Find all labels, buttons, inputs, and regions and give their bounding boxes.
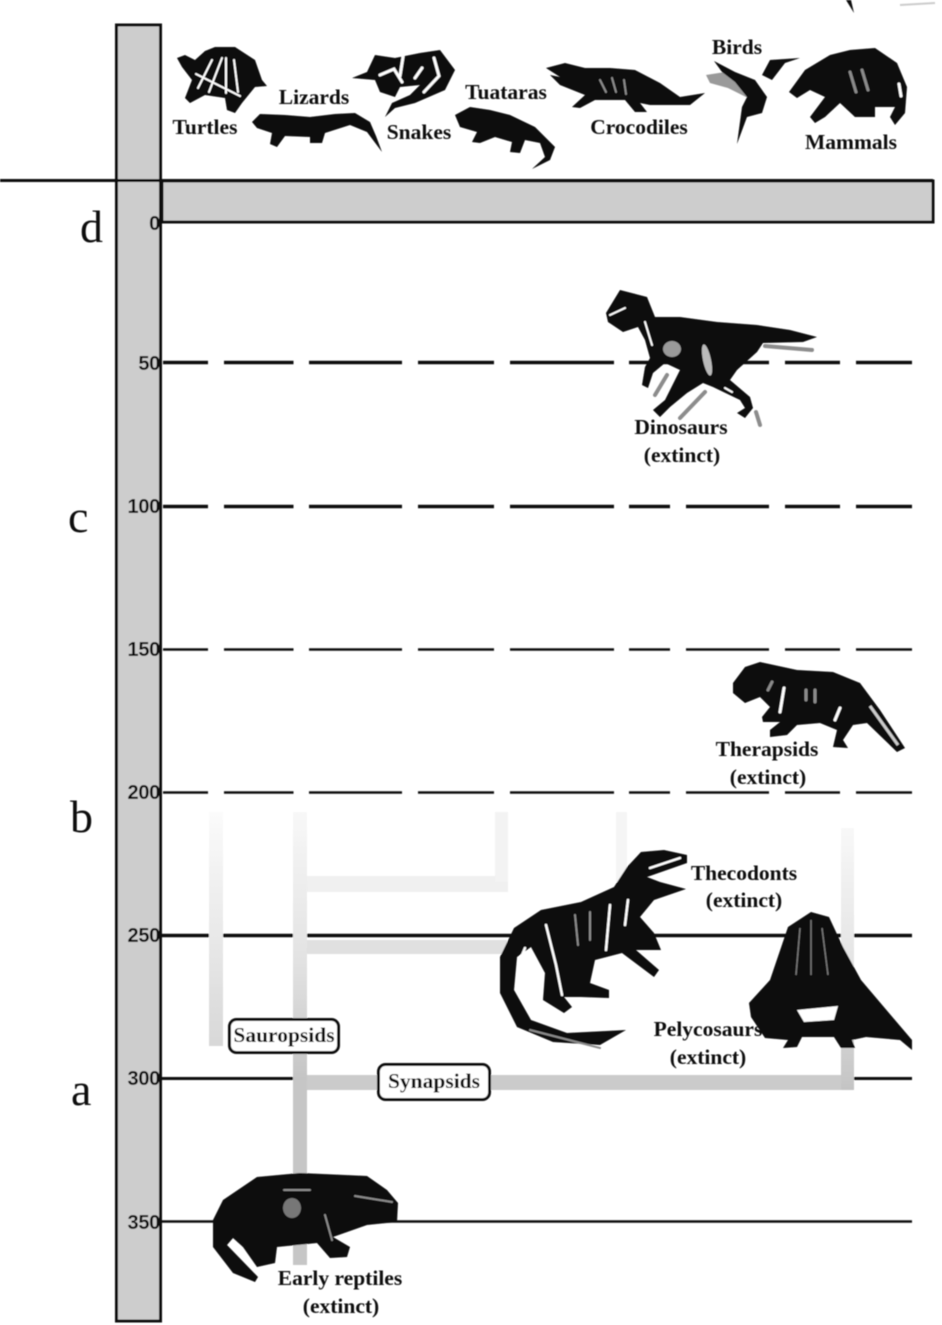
- label: Sauropsids: [230, 1020, 338, 1052]
- icon: mammal: [789, 48, 907, 125]
- icon: snake: [352, 50, 455, 117]
- top band at 0: [162, 181, 933, 222]
- side letters: a: [71, 1064, 91, 1115]
- icon: lizard: [252, 113, 382, 152]
- text: Mammals: Mammals: [805, 130, 897, 154]
- axis numbers: 100: [128, 496, 160, 518]
- text: Birds: Birds: [712, 35, 762, 59]
- text: Pelycosaurs extinct: (extinct): [670, 1045, 746, 1069]
- text: Turtles: Turtles: [173, 115, 237, 139]
- axis numbers: 250: [128, 925, 160, 947]
- icon: dinosaur: [606, 290, 817, 425]
- icon: turtle: [177, 47, 267, 113]
- icon: crocodile: [546, 63, 705, 112]
- axis numbers: 50: [138, 353, 160, 375]
- icon: bird: [706, 58, 800, 144]
- icon: therapsid: [733, 662, 905, 752]
- text: Pelycosaurs: Pelycosaurs: [654, 1017, 762, 1041]
- text: Therapsids extinct: (extinct): [730, 765, 806, 789]
- phylogenetic branches: [209, 812, 854, 1265]
- text: Therapsids: Therapsids: [716, 737, 818, 761]
- side letters: c: [68, 491, 88, 542]
- text: Crocodiles: Crocodiles: [590, 115, 688, 139]
- side letters: d: [80, 201, 103, 252]
- text: Thecodonts extinct: (extinct): [706, 888, 782, 912]
- axis numbers: 0: [149, 213, 160, 235]
- text: Early reptiles: Early reptiles: [278, 1266, 402, 1290]
- icon: stray grey mark: [900, 3, 935, 5]
- axis numbers: 300: [128, 1068, 160, 1090]
- text: Dinosaurs: Dinosaurs: [634, 415, 728, 439]
- axis numbers: 150: [128, 639, 160, 661]
- text: Dinosaurs extinct: (extinct): [644, 443, 720, 467]
- icon: stray mark: [846, 0, 854, 13]
- text: Tuataras: Tuataras: [465, 80, 547, 104]
- icon: thecodont: [500, 850, 687, 1048]
- icon: early reptile: [213, 1173, 398, 1282]
- icon: tuatara: [455, 107, 555, 169]
- label: Synapsids: Synapsids: [388, 1069, 480, 1093]
- side letters: [68, 201, 103, 1115]
- axis numbers: 200: [128, 782, 160, 804]
- icon: pelycosaur: [749, 912, 912, 1050]
- label: Synapsids: [378, 1064, 490, 1100]
- label: Sauropsids: Sauropsids: [233, 1023, 335, 1047]
- header rule: [0, 179, 933, 182]
- text: Early reptiles extinct: (extinct): [303, 1294, 379, 1318]
- side letters: b: [70, 791, 93, 842]
- axis numbers: 350: [128, 1212, 160, 1234]
- time axis column: [116, 25, 160, 1321]
- gridlines: [162, 362, 912, 1222]
- text: Snakes: Snakes: [387, 120, 451, 144]
- text: Thecodonts: Thecodonts: [691, 861, 797, 885]
- text: Lizards: Lizards: [279, 85, 349, 109]
- axis numbers: [128, 213, 160, 1234]
